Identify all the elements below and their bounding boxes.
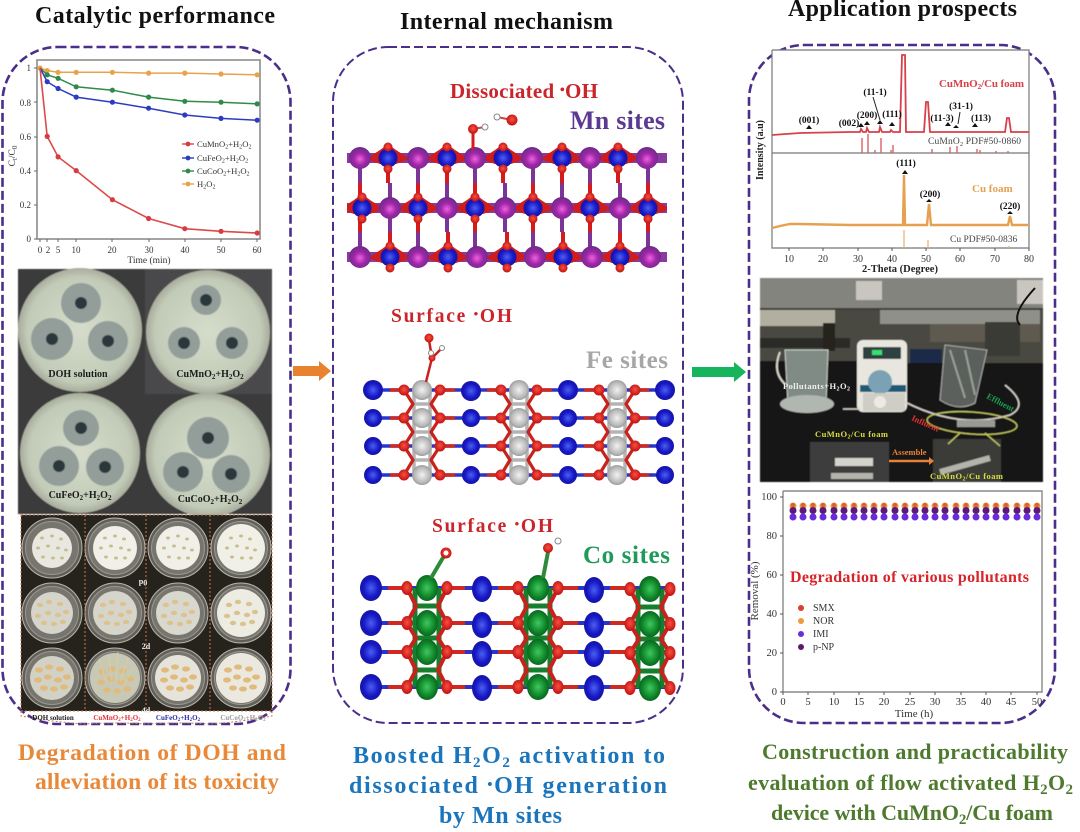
outlet plug wire — [1017, 288, 1035, 325]
line chart: degradation kinetics: 0 — [11, 145, 19, 149]
legend: chart series: O — [240, 166, 247, 176]
caption: CuMnO2: +H — [121, 714, 131, 722]
caption: CuCoO2: 2 — [255, 718, 258, 723]
legend: pollutants: NOR — [813, 616, 834, 627]
legend: chart series: 2 — [248, 144, 251, 150]
reference sticks CuMnO2 — [862, 134, 1008, 153]
panel: internal mechanism — [333, 9, 683, 829]
plate label: CuCoO2: 2 — [239, 498, 243, 506]
summary: boosted H2O2 activation: Boosted H — [353, 743, 472, 769]
XRD chart: 80 — [1024, 254, 1034, 265]
summary: construction and practicability — [748, 739, 1073, 828]
structure label: surface OH on Fe: Surface — [391, 306, 465, 327]
scatter chart: pollutant removal: 20 — [766, 648, 777, 659]
line chart: degradation kinetics: Time (min) — [127, 255, 171, 266]
label: CuMnO2 Cu foam assembled: CuMnO — [930, 471, 962, 481]
legend: chart series: 2 — [203, 184, 206, 190]
panel border: catalytic performance — [2, 47, 290, 724]
scatter chart: pollutant removal: 40 — [981, 697, 991, 708]
plate label: CuFeO2: 2 — [80, 494, 84, 502]
label: CuMnO2 Cu foam inset: /Cu foam — [850, 429, 888, 439]
peak labels: (31-1) — [949, 101, 973, 112]
caption: CuCoO2: 2 — [263, 718, 266, 723]
line chart: degradation kinetics — [8, 60, 262, 266]
scatter chart: pollutant removal: 20 — [879, 697, 889, 708]
caption: CuMnO2: 2 — [118, 718, 121, 723]
line chart: degradation kinetics: 0 — [38, 245, 43, 255]
legend: chart series: +H — [225, 153, 236, 163]
summary: boosted H2O2 activation: dissociated — [349, 773, 478, 799]
peak labels: (220) — [1000, 201, 1020, 212]
series label: CuMnO2 Cu foam: /Cu foam — [980, 78, 1024, 90]
plate label: CuFeO2: 2 — [108, 494, 112, 502]
series: H2O2 — [37, 65, 260, 77]
legend: chart series — [182, 139, 251, 190]
line chart: degradation kinetics: 0 — [26, 234, 32, 244]
scatter chart: pollutant removal — [749, 491, 1042, 720]
label: CuMnO2 Cu foam inset: CuMnO — [815, 429, 847, 439]
heading: catalytic performance: Catalytic performance — [35, 3, 275, 29]
line chart: degradation kinetics: 0.2 — [20, 200, 31, 210]
plate label: CuMnO2: 2 — [229, 373, 233, 381]
peak labels: (002) — [839, 118, 859, 129]
line chart: degradation kinetics: 2 — [46, 245, 50, 255]
reference label: CuMnO2 PDF: 2 — [960, 141, 963, 148]
legend: chart series: CuFeO — [197, 153, 222, 163]
structure label: Co sites: Co sites — [583, 542, 670, 569]
summary: construction and practicability: 2 — [959, 812, 966, 828]
line chart: degradation kinetics: 0.8 — [20, 98, 32, 108]
panel border: internal mechanism — [333, 47, 683, 723]
label: pollutants: 2 — [847, 386, 850, 392]
plate label: CuFeO2: 2 — [97, 494, 101, 502]
peak labels: (11-3) — [930, 113, 954, 124]
peak labels: (200) — [920, 189, 940, 200]
day label: 4d: 4d — [142, 706, 151, 715]
series label: CuMnO2 Cu foam: CuMnO — [939, 78, 978, 90]
atomic structure: Co sites — [360, 538, 676, 701]
summary: boosted H2O2 activation: • — [487, 777, 492, 793]
structure label: surface OH on Co: Surface — [432, 516, 506, 537]
caption: CuMnO2: 2 — [130, 718, 133, 723]
structure label: surface OH on Co: OH — [521, 516, 553, 537]
XRD chart: Intensity (a.u) — [755, 120, 766, 180]
label: pollutants: Pollutants+H — [783, 381, 836, 391]
peak labels: (113) — [971, 113, 991, 124]
reference label: Cu PDF: Cu PDF#50-0836 — [950, 235, 1018, 245]
structure label: dissociated OH: Dissociated — [450, 79, 554, 103]
day label: 0d: 0d — [138, 578, 147, 587]
legend: chart series: 2 — [223, 172, 226, 178]
atomic structure: Fe sites — [363, 334, 675, 485]
caption: CuCoO2: O — [258, 714, 264, 722]
summary: boosted H2O2 activation: O — [482, 743, 501, 769]
plate label: CuFeO2: O — [100, 490, 108, 501]
chart title: degradation of various pollutants: Degradation of various pollutants — [790, 569, 1029, 586]
caption: CuCoO2: CuCoO — [220, 714, 243, 722]
summary: construction and practicability: /Cu foam — [965, 800, 1053, 825]
summary: construction and practicability: device with CuMnO — [771, 800, 959, 825]
plate label: CuMnO2: +H — [215, 369, 229, 380]
plate label: CuCoO2: +H — [214, 494, 228, 505]
legend: chart series: 2 — [236, 158, 239, 164]
caption: CuFeO2: +H — [180, 714, 190, 722]
line chart: degradation kinetics: 1 — [26, 63, 31, 73]
arrow: assemble: Assemble — [892, 447, 927, 457]
legend: pollutants: p-NP — [813, 642, 835, 653]
line chart: degradation kinetics: 10 — [72, 245, 81, 255]
caption: CuCoO2: +H — [246, 714, 256, 722]
caption: CuMnO2: CuMnO — [93, 714, 118, 722]
caption: DOH solution: DOH solution — [32, 714, 74, 722]
series: CuMnO2 — [40, 68, 260, 236]
scatter chart: pollutant removal: 45 — [1006, 697, 1016, 708]
peak markers — [806, 120, 1013, 214]
label: effluent: Effluent — [985, 391, 1016, 414]
scatter chart: pollutant removal: 25 — [905, 697, 915, 708]
legend: chart series: +H — [226, 166, 237, 176]
label: CuMnO2 Cu foam inset: 2 — [848, 434, 851, 440]
atomic structure: Mn sites — [340, 114, 670, 272]
data points — [790, 502, 1040, 520]
scatter chart: pollutant removal: 60 — [766, 570, 777, 581]
panel: application prospects — [748, 0, 1073, 828]
structure label: dissociated OH: OH — [565, 79, 598, 103]
series label: CuMnO2 Cu foam: 2 — [978, 82, 982, 91]
summary: degradation of DOH — [18, 740, 286, 795]
structure label: surface OH on Co: • — [515, 516, 520, 531]
line chart: degradation kinetics: 50 — [216, 245, 226, 255]
day label: 2d: 2d — [142, 642, 151, 651]
caption: CuFeO2: CuFeO — [156, 714, 178, 722]
line chart: degradation kinetics: 40 — [180, 245, 190, 255]
scatter chart: pollutant removal: 15 — [854, 697, 864, 708]
arrow: mechanism to application — [692, 362, 746, 382]
series: CuCoO2 — [40, 68, 260, 106]
caption: CuMnO2: 2 — [138, 718, 141, 723]
reference label: CuMnO2 PDF: CuMnO — [928, 137, 960, 147]
series: CuFeO2 — [40, 68, 260, 123]
scatter chart: pollutant removal: 10 — [829, 697, 839, 708]
caption: CuFeO2: 2 — [178, 718, 181, 723]
XRD chart: 10 — [784, 254, 794, 265]
legend: chart series: 2 — [222, 158, 225, 164]
summary: construction and practicability: O — [1048, 770, 1065, 795]
label: pollutants: O — [840, 381, 847, 391]
legend: chart series: 2 — [247, 172, 250, 178]
plate label: CuCoO2: CuCoO — [178, 494, 211, 505]
panel border: application prospects — [749, 45, 1055, 723]
line chart: degradation kinetics: 0.4 — [20, 166, 32, 176]
legend: chart series: 2 — [237, 172, 240, 178]
scatter chart: pollutant removal: Time (h) — [895, 708, 934, 720]
scatter chart: pollutant removal: Removal (%) — [749, 561, 761, 620]
reference label: CuMnO2 PDF: PDF#50-0860 — [963, 137, 1021, 147]
legend: chart series: O — [239, 153, 245, 163]
summary: construction and practicability: 2 — [1040, 782, 1048, 798]
label: influent: Influent — [910, 413, 941, 434]
legend: chart series: O — [206, 179, 212, 189]
photo grid: inhibition zone plates — [18, 268, 272, 517]
legend: chart series: +H — [228, 139, 239, 149]
summary: degradation of DOH: alleviation of its toxicity — [35, 769, 279, 795]
caption: CuMnO2: O — [133, 714, 139, 722]
XRD chart — [755, 50, 1034, 275]
series label: Cu foam: Cu foam — [972, 183, 1013, 195]
caption: CuFeO2: 2 — [198, 718, 201, 723]
structure label: Fe sites: Fe sites — [586, 347, 668, 374]
plate label: CuFeO2: +H — [83, 490, 97, 501]
scatter chart: pollutant removal: 5 — [805, 697, 811, 708]
legend: chart series: CuMnO — [197, 139, 225, 149]
heading: internal mechanism: Internal mechanism — [400, 9, 613, 35]
structure label: surface OH on Fe: • — [474, 306, 479, 321]
arrow: assemble — [889, 447, 934, 465]
peak labels: (001) — [799, 115, 819, 126]
caption: CuFeO2: 2 — [190, 718, 193, 723]
peak labels — [799, 87, 1020, 212]
reference sticks Cu — [904, 230, 1009, 248]
plate label: CuCoO2: 2 — [228, 498, 232, 506]
structure label: dissociated OH: • — [560, 83, 565, 98]
summary: degradation of DOH: Degradation of DOH and — [18, 740, 286, 766]
structure label: surface OH on Fe: OH — [480, 306, 512, 327]
label: pollutants: 2 — [837, 386, 840, 392]
plate label: CuMnO2: 2 — [240, 373, 244, 381]
legend: chart series: 2 — [239, 144, 242, 150]
line chart: degradation kinetics: /C — [8, 149, 18, 158]
plate label: CuCoO2: O — [231, 494, 239, 505]
peak labels: (111) — [882, 109, 902, 120]
legend: pollutants: IMI — [813, 629, 829, 640]
peak labels: (11-1) — [863, 87, 887, 98]
line chart: degradation kinetics: t — [11, 158, 19, 160]
legend: chart series: 2 — [212, 184, 215, 190]
summary: construction and practicability: 2 — [1066, 782, 1073, 798]
legend: pollutants — [798, 603, 835, 653]
scatter chart: pollutant removal: 100 — [761, 492, 777, 503]
orange XRD trace — [772, 175, 1029, 228]
label: CuMnO2 Cu foam assembled: /Cu foam — [965, 471, 1003, 481]
XRD chart: 50 — [921, 254, 931, 265]
summary: boosted H2O2 activation: by Mn sites — [439, 803, 562, 829]
scatter chart: pollutant removal: 0 — [772, 687, 777, 698]
plate label: CuMnO2: CuMnO — [176, 369, 212, 380]
caption: CuCoO2: 2 — [243, 718, 246, 723]
scatter chart: pollutant removal: 80 — [766, 531, 777, 542]
scatter chart: pollutant removal: 50 — [1032, 697, 1042, 708]
caption: CuFeO2: O — [192, 714, 198, 722]
legend: chart series: O — [242, 139, 248, 149]
summary: boosted H2O2 activation: OH generation — [494, 773, 667, 799]
XRD chart: 20 — [818, 254, 828, 265]
scatter chart: pollutant removal: 0 — [780, 697, 786, 708]
summary: boosted H2O2 activation: activation to — [511, 743, 665, 769]
summary: boosted H2O2 activation: 2 — [502, 755, 510, 771]
scatter chart: pollutant removal: 30 — [930, 697, 940, 708]
line chart: degradation kinetics: 60 — [252, 245, 262, 255]
red XRD trace — [772, 55, 1029, 135]
legend: chart series: H — [197, 179, 203, 189]
label: CuMnO2 Cu foam assembled: 2 — [963, 476, 966, 482]
line chart: degradation kinetics: 5 — [56, 245, 61, 255]
plate label: CuMnO2: 2 — [212, 373, 216, 381]
panel: catalytic performance — [2, 3, 290, 795]
XRD chart: 60 — [955, 254, 965, 265]
line chart: degradation kinetics: C — [8, 160, 18, 166]
line chart: degradation kinetics: 20 — [108, 245, 117, 255]
summary: boosted H2O2 activation: 2 — [473, 755, 481, 771]
legend: chart series: CuCoO — [197, 166, 223, 176]
XRD chart: 30 — [853, 254, 863, 265]
plate label: CuFeO2: CuFeO — [49, 490, 80, 501]
summary: construction and practicability: Construction and practicability — [762, 739, 1068, 764]
line chart: degradation kinetics: 30 — [144, 245, 154, 255]
photo grid: seed germination — [21, 515, 272, 724]
summary: boosted H2O2 activation — [349, 743, 667, 829]
XRD chart: 40 — [887, 254, 897, 265]
plate label: CuCoO2: 2 — [211, 498, 215, 506]
structure label: Mn sites: Mn sites — [570, 106, 665, 135]
line chart: degradation kinetics: 0.6 — [20, 132, 32, 142]
legend: chart series: 2 — [225, 144, 228, 150]
plate label: CuMnO2: O — [232, 369, 240, 380]
plate label: DOH solution: DOH solution — [48, 369, 108, 380]
scatter chart: pollutant removal: 35 — [956, 697, 966, 708]
summary: construction and practicability: evaluation of flow activated H — [748, 770, 1040, 795]
peak labels: (111) — [896, 158, 916, 169]
legend: chart series: 2 — [245, 158, 248, 164]
XRD chart: 70 — [990, 254, 1000, 265]
peak labels: (200) — [857, 110, 877, 121]
scatter chart: pollutant removal: 40 — [766, 609, 777, 620]
XRD chart: 2-Theta (Degree) — [862, 264, 938, 275]
photo: flow device setup — [760, 278, 1043, 482]
legend: pollutants: SMX — [813, 603, 835, 614]
arrow: catalytic to mechanism — [293, 361, 331, 381]
